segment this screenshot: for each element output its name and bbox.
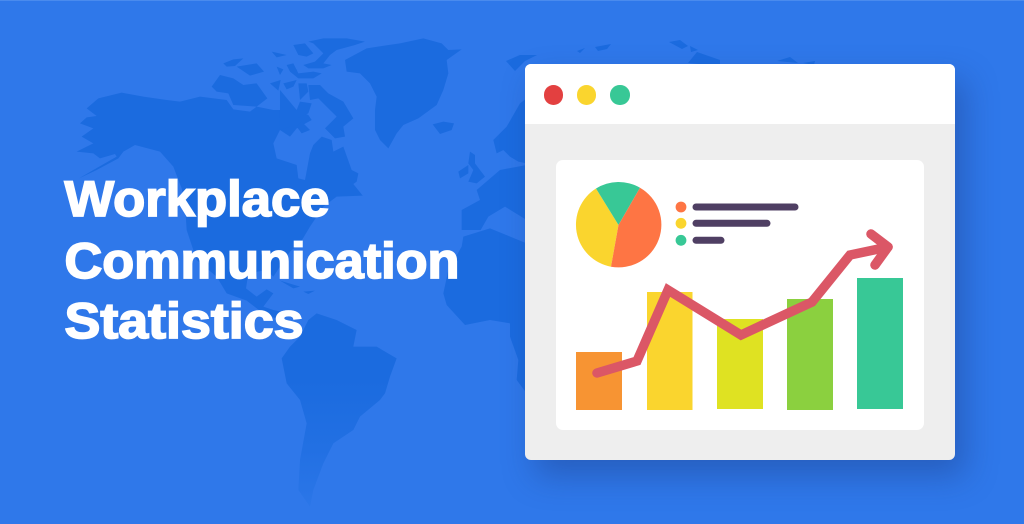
- button: red: [544, 85, 563, 105]
- South America: [282, 313, 397, 507]
- pie chart: [576, 182, 661, 267]
- Arctic Canada islands: [212, 75, 267, 107]
- panel: chart card: [556, 160, 924, 430]
- Iceland: [433, 122, 454, 134]
- Europe: [462, 165, 527, 230]
- Africa: [443, 228, 527, 393]
- Greenland: [345, 38, 462, 148]
- panel: browser window: [525, 64, 955, 460]
- Scandinavia: [493, 98, 527, 163]
- window title bar: [525, 64, 955, 124]
- North America: [77, 93, 363, 320]
- title: Communication: [64, 233, 459, 289]
- British Isles: [468, 152, 485, 183]
- legend: [676, 202, 795, 246]
- Arctic Russia islands: [506, 55, 537, 71]
- title: [63, 171, 459, 349]
- title: Workplace: [64, 171, 330, 227]
- trend arrow: [597, 234, 888, 373]
- chart illustration: [576, 182, 903, 410]
- title: Statistics: [64, 293, 304, 349]
- button: green: [610, 85, 630, 105]
- button: yellow: [576, 85, 596, 105]
- bar chart: [576, 278, 903, 410]
- Caribbean: [280, 281, 300, 288]
- Baffin Island: [308, 85, 353, 138]
- Ellesmere Island: [303, 38, 365, 68]
